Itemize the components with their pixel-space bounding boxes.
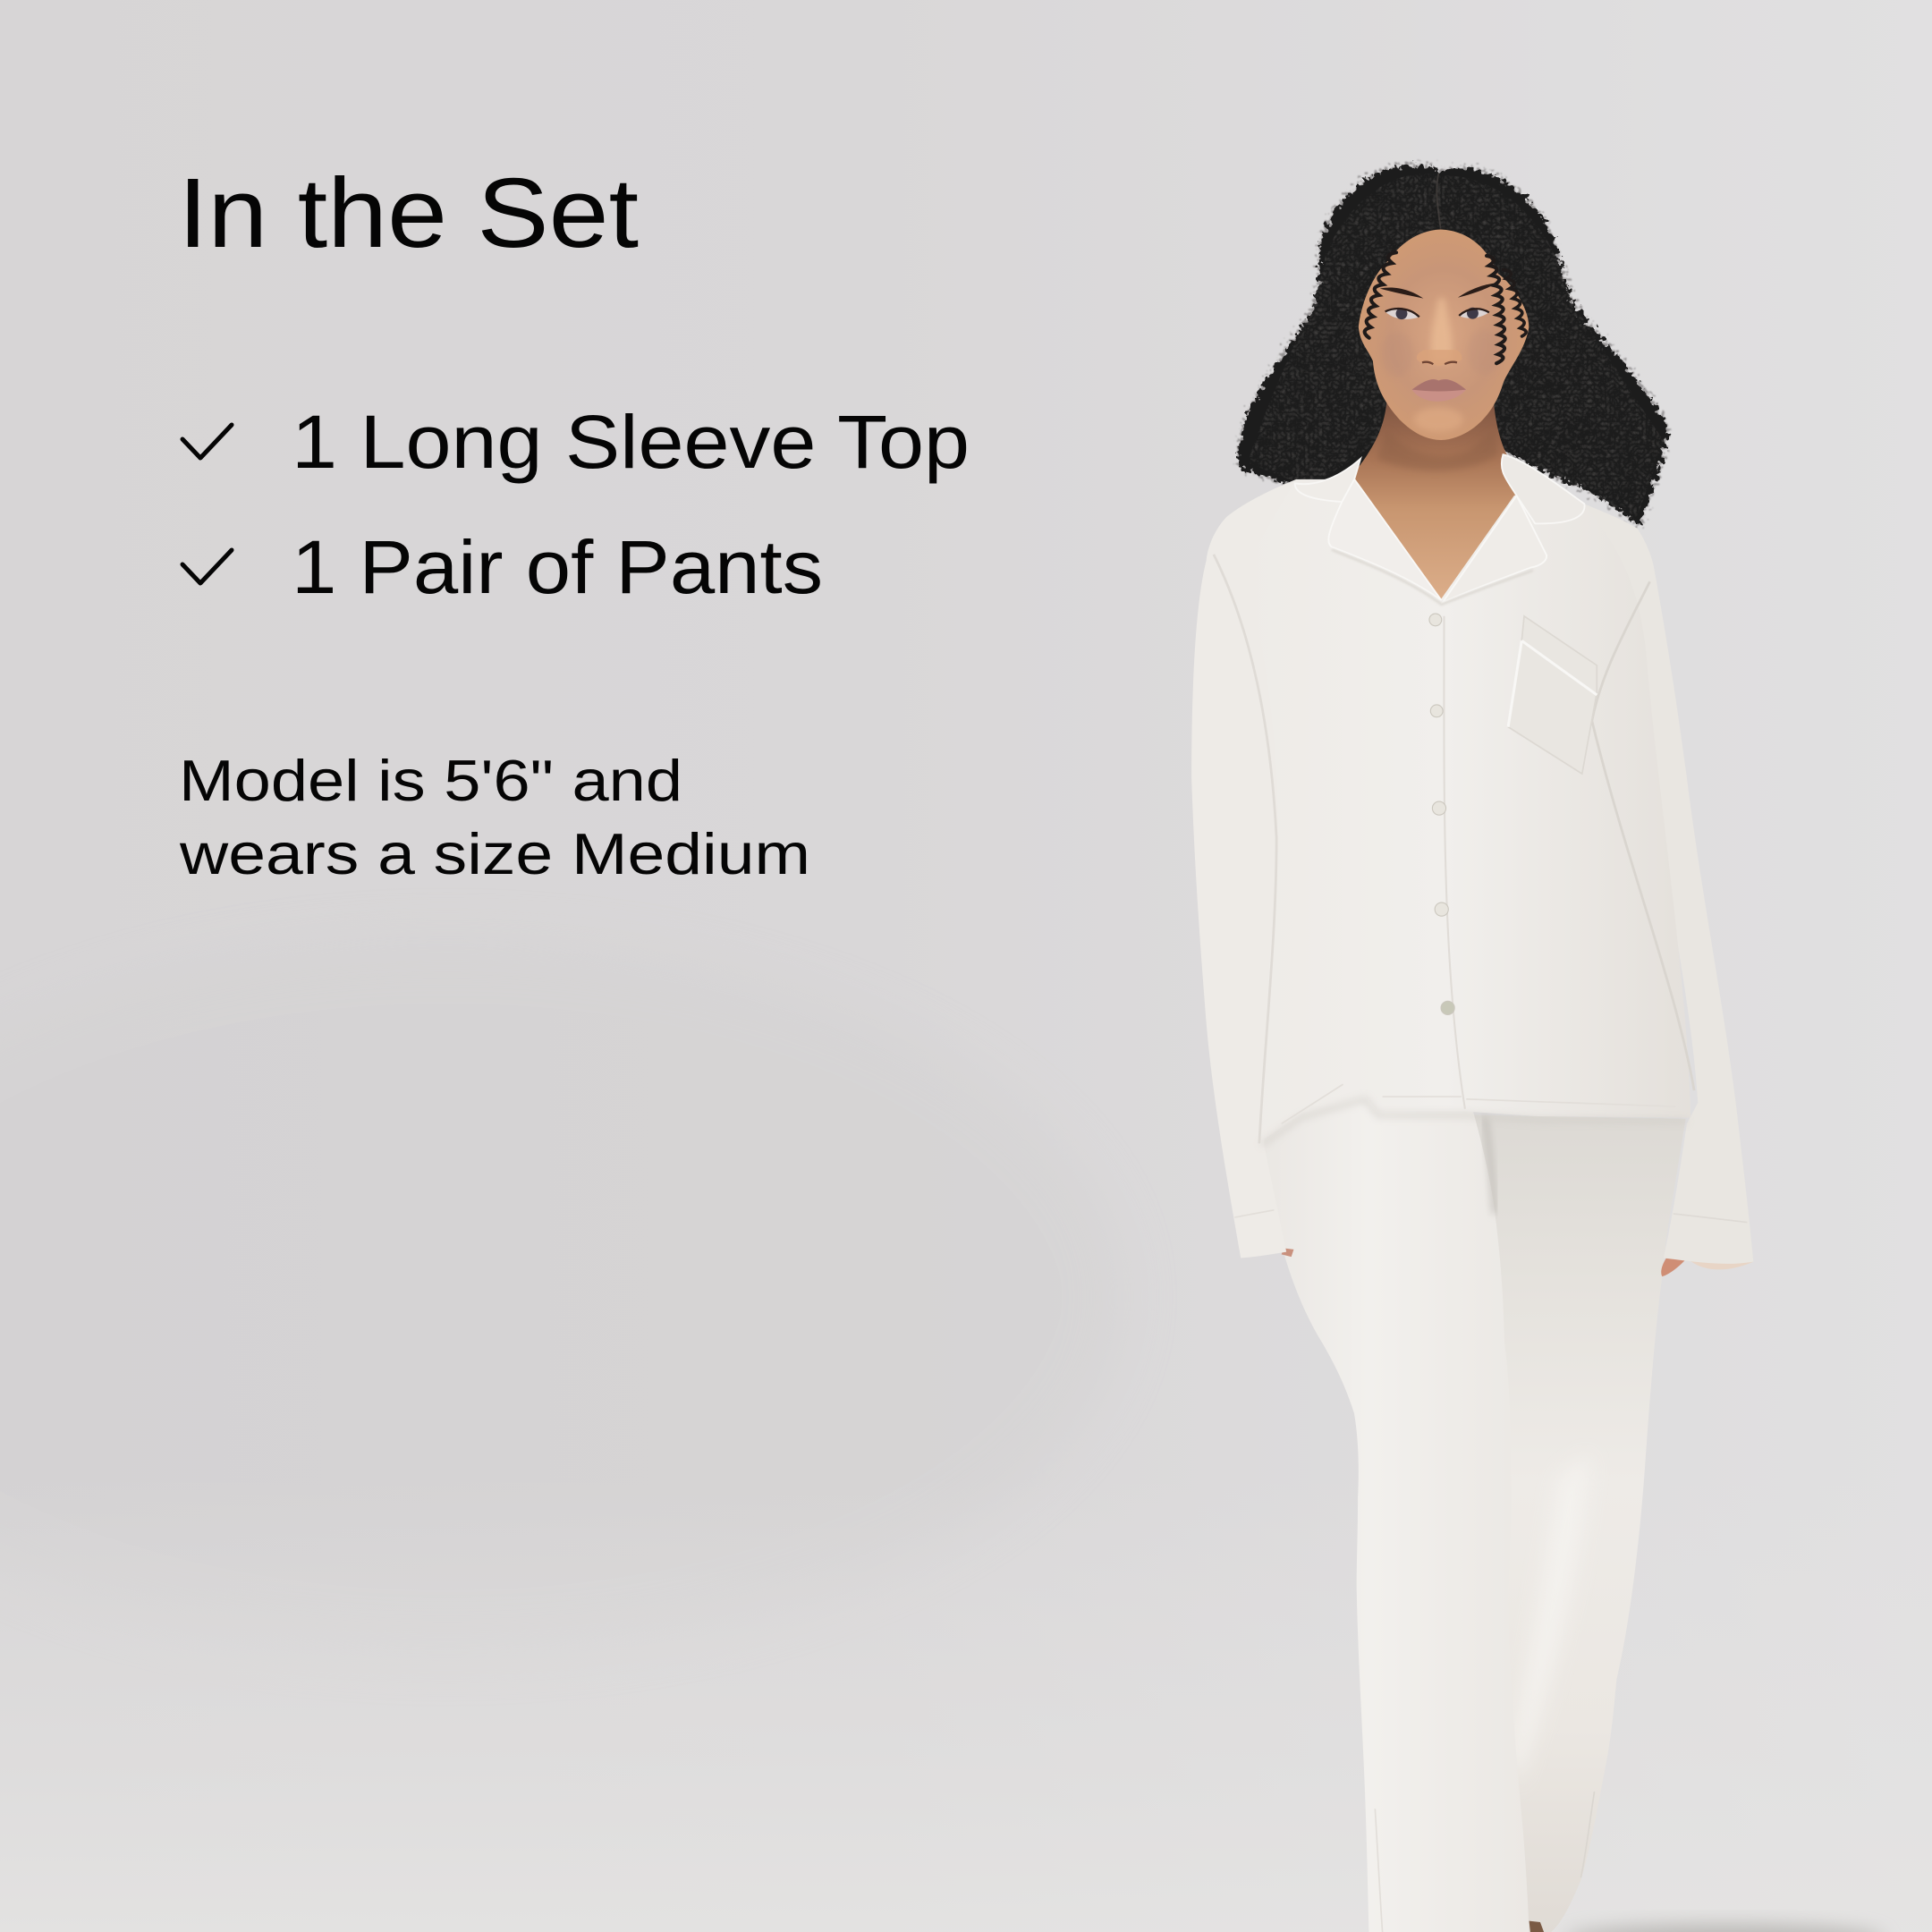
hem stitching	[1282, 1084, 1675, 1123]
nose highlight	[1431, 299, 1453, 362]
outseam front leg	[1375, 1809, 1383, 1932]
chin highlight	[1414, 407, 1463, 432]
front curl right	[1487, 256, 1505, 363]
pocket piping	[1508, 640, 1597, 727]
collar and lapels	[1295, 454, 1585, 605]
left sleeve	[1191, 479, 1296, 1258]
placket line	[1444, 616, 1465, 1109]
hair mass	[1238, 165, 1667, 524]
item: pants: 1 Pair of Pants	[292, 525, 823, 609]
torso	[1244, 479, 1690, 1141]
model size note: Model is 5'6" and	[179, 748, 682, 813]
model size note	[179, 748, 810, 886]
face	[1359, 230, 1529, 440]
crotch fold shadow	[1485, 1116, 1495, 1214]
model size note: wears a size Medium	[179, 821, 810, 886]
left sleeve seam	[1214, 555, 1276, 1143]
eye right	[1459, 308, 1489, 319]
chest pocket	[1508, 616, 1597, 774]
right sleeve seam	[1592, 581, 1694, 1090]
heading: In the Set	[178, 158, 639, 268]
outseam back leg	[1580, 1792, 1595, 1877]
right lapel	[1443, 496, 1546, 602]
right sleeve	[1585, 504, 1753, 1264]
neck shadow under chin	[1377, 430, 1498, 470]
eye left	[1385, 308, 1419, 319]
cheek shading	[1381, 329, 1500, 377]
left cuff stitch	[1234, 1210, 1274, 1217]
eyebrow right	[1458, 283, 1497, 298]
left collar	[1295, 459, 1360, 502]
inner cuff	[1685, 1254, 1753, 1269]
shirt	[1191, 454, 1753, 1264]
lips	[1411, 379, 1466, 402]
left hand sliver	[1282, 1248, 1293, 1257]
front leg	[1262, 1084, 1530, 1932]
item: top: 1 Long Sleeve Top	[292, 400, 970, 484]
hair part	[1436, 174, 1441, 229]
front curl left	[1365, 252, 1396, 338]
checklist	[182, 400, 970, 609]
neck and chest	[1351, 397, 1535, 600]
back leg	[1474, 1115, 1685, 1932]
pants	[1262, 1084, 1685, 1932]
back leg highlight	[1511, 1454, 1589, 1786]
buttons	[1429, 614, 1454, 1014]
hair texture	[1248, 174, 1665, 521]
right collar	[1502, 454, 1585, 523]
lapel shadow	[1332, 550, 1533, 605]
left lapel	[1328, 479, 1442, 600]
floor shadow	[1564, 1925, 1885, 1932]
eyebrow left	[1380, 288, 1423, 299]
check icon	[182, 425, 232, 458]
check icon	[182, 550, 232, 583]
right cuff stitch	[1674, 1214, 1747, 1223]
second curl right	[1503, 270, 1526, 336]
photo: model wearing pajama set	[1191, 165, 1885, 1932]
hair frizz halo	[1238, 165, 1667, 524]
right hand	[1661, 1254, 1690, 1276]
nose	[1417, 350, 1462, 366]
hem shadow	[1262, 1099, 1687, 1145]
foot	[1530, 1921, 1544, 1932]
hair and face	[1238, 165, 1667, 600]
